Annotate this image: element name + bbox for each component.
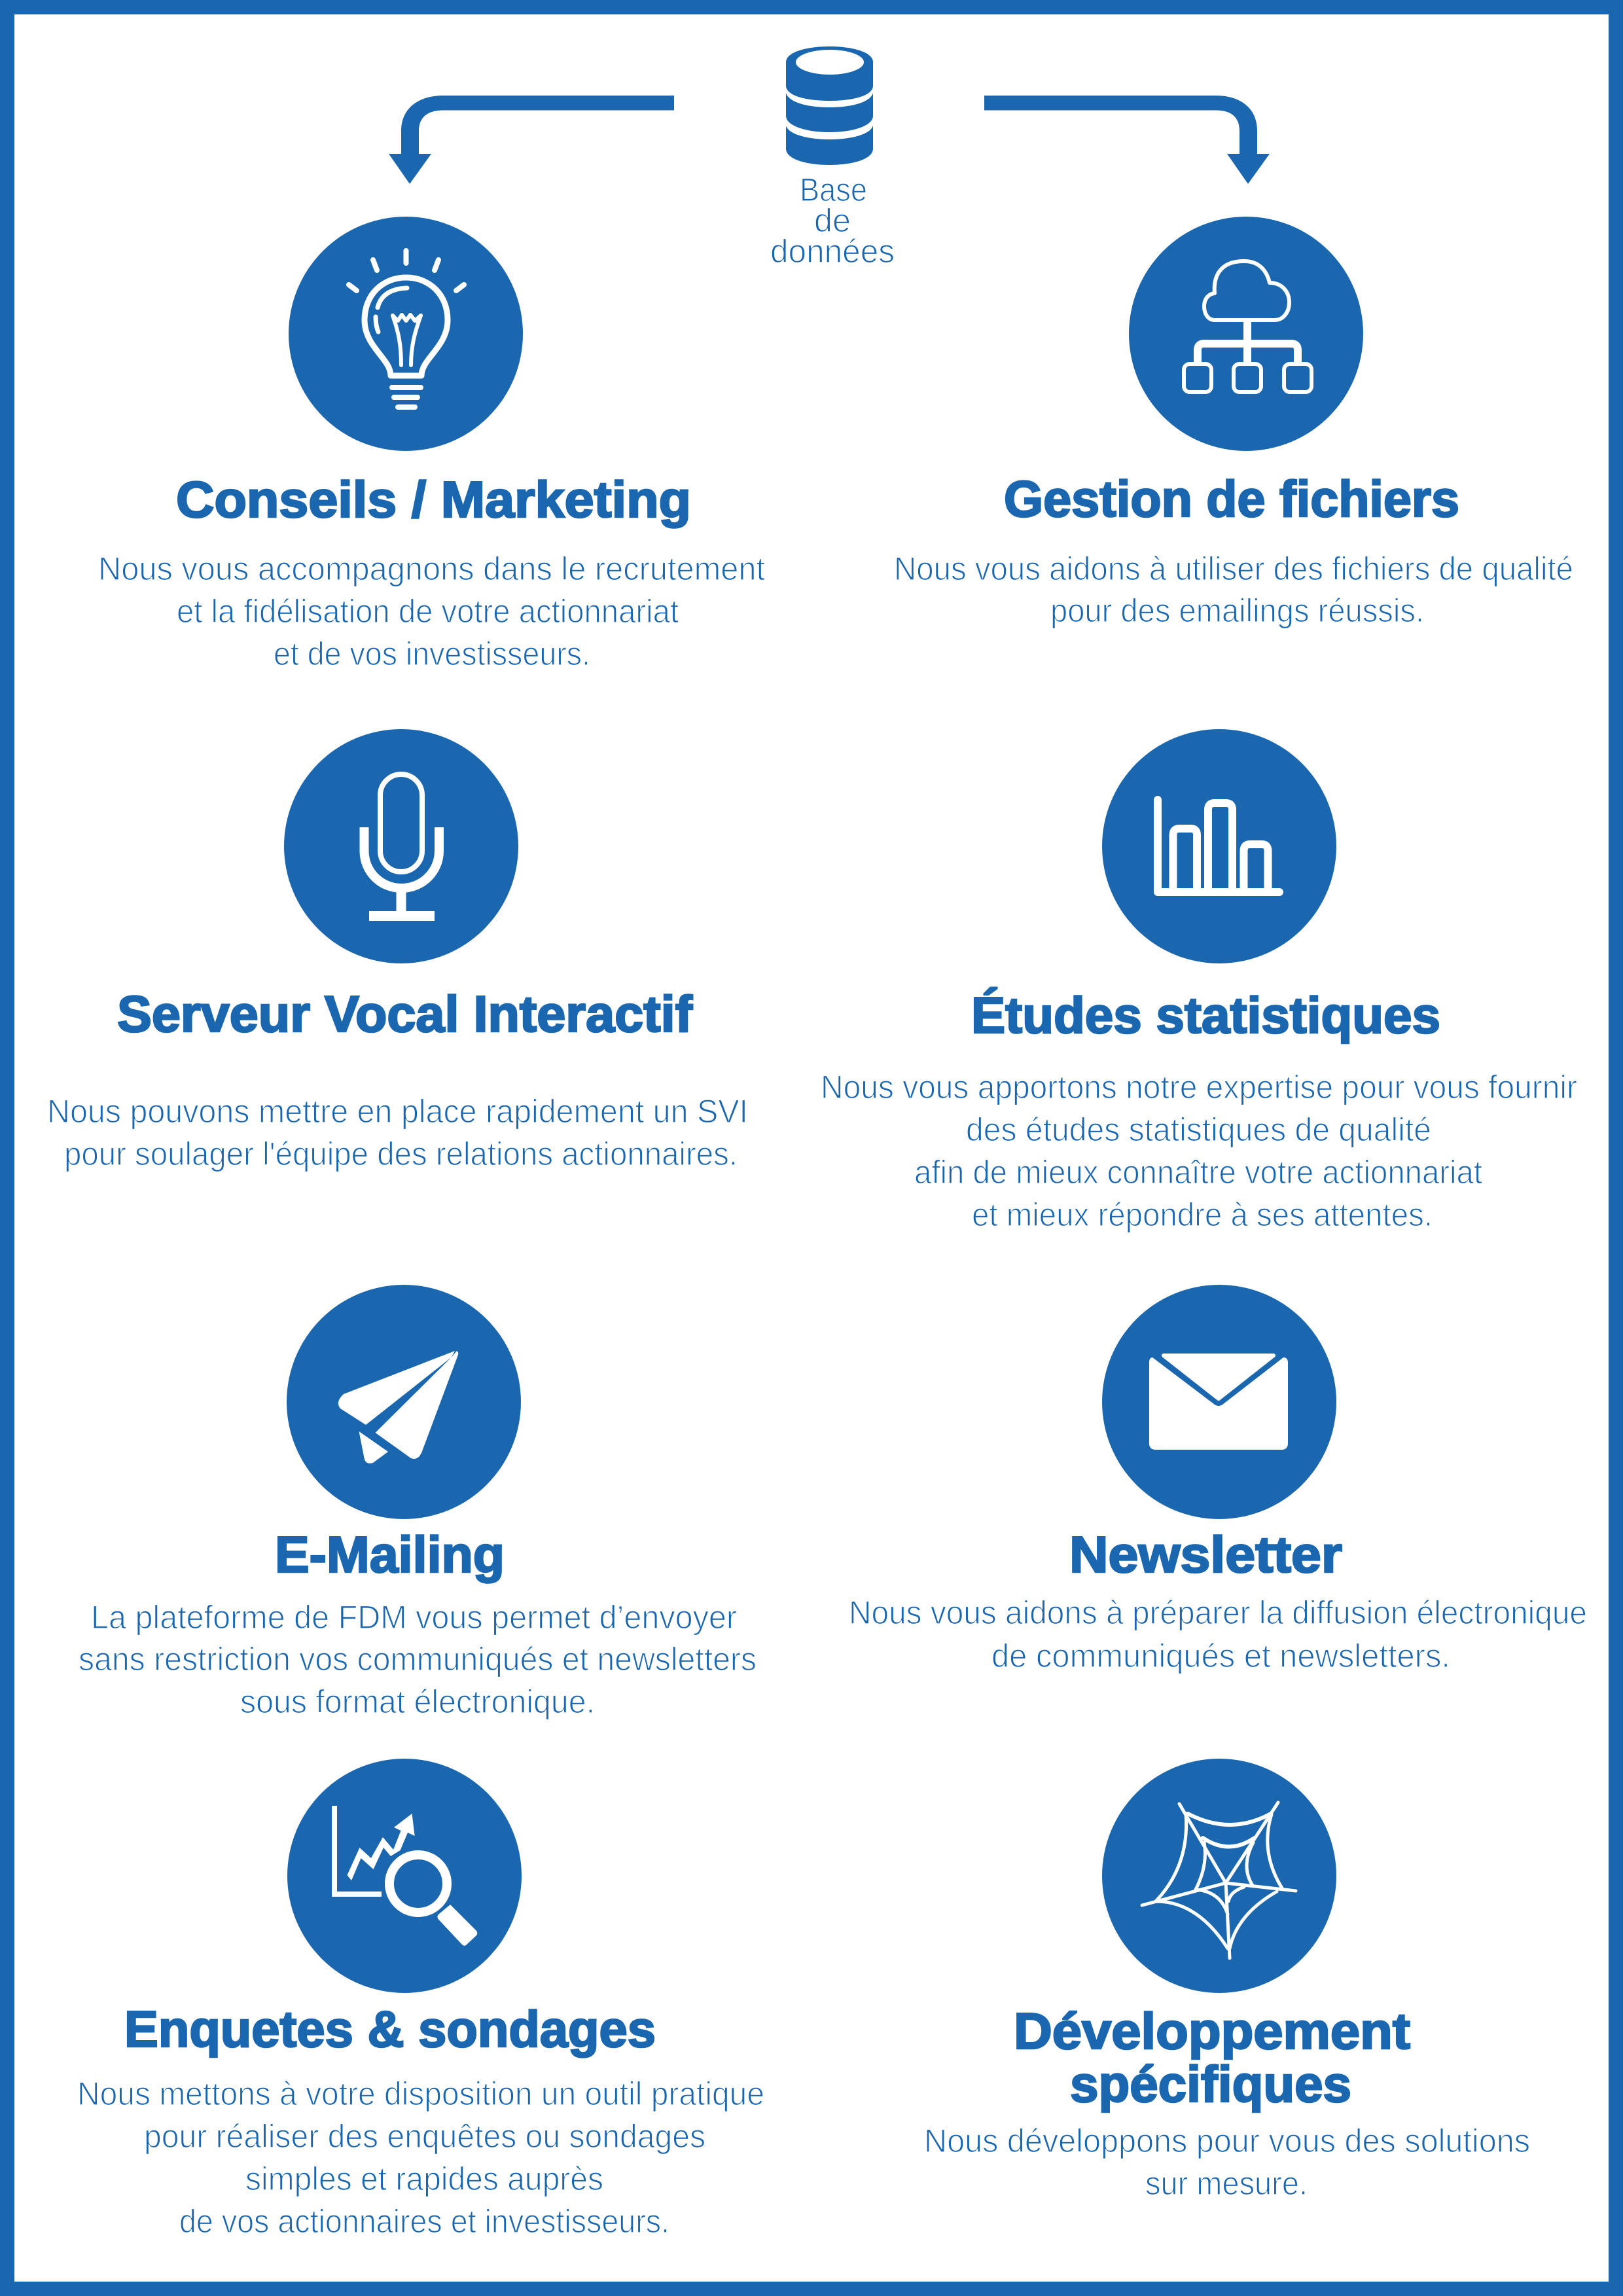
text block: et de vos investisseurs. <box>274 636 590 672</box>
text block <box>77 2075 764 2240</box>
heading: E-Mailing <box>275 1526 505 1583</box>
heading: Serveur Vocal Interactif <box>117 985 693 1043</box>
heading: spécifiques <box>1070 2055 1351 2113</box>
heading: Développement <box>1014 2002 1410 2060</box>
panel: développement spécifiques <box>924 1759 1530 2202</box>
panel: newsletter <box>849 1285 1587 1674</box>
icon: bar chart <box>1102 729 1336 963</box>
text block: des études statistiques de qualité <box>966 1111 1431 1148</box>
label: base de données: Base <box>800 171 867 208</box>
heading: Newsletter <box>1069 1526 1342 1583</box>
text block: simples et rapides auprès <box>245 2161 603 2197</box>
text block: et la fidélisation de votre actionnariat <box>177 593 679 630</box>
text block: sans restriction vos communiqués et newsletters <box>79 1641 757 1677</box>
icon: chart with magnifier <box>287 1759 522 1993</box>
text block <box>79 1599 757 1720</box>
text block <box>924 2123 1530 2202</box>
text block <box>894 550 1573 629</box>
text block: de vos actionnaires et investisseurs. <box>179 2203 669 2240</box>
text block: La plateforme de FDM vous permet d’envoyer <box>91 1599 737 1636</box>
text block: sous format électronique. <box>240 1683 595 1720</box>
icon: envelope <box>1102 1285 1336 1519</box>
text block: Nous mettons à votre disposition un outil pratique <box>77 2075 764 2112</box>
text block: Nous développons pour vous des solutions <box>924 2123 1530 2159</box>
panel: gestion de fichiers <box>894 217 1573 629</box>
text block: pour des emailings réussis. <box>1050 592 1424 629</box>
text block: Nous vous aidons à utiliser des fichiers de qualité <box>894 550 1573 587</box>
text block: pour réaliser des enquêtes ou sondages <box>144 2118 705 2155</box>
icon: lightbulb <box>289 217 523 451</box>
heading: Études statistiques <box>971 986 1440 1044</box>
label: base de données: de <box>814 202 851 239</box>
panel: enquetes et sondages <box>77 1759 764 2240</box>
label: base de données: données <box>770 233 895 270</box>
heading <box>1014 2002 1410 2113</box>
text block: pour soulager l'équipe des relations actionnaires. <box>64 1136 738 1172</box>
text block <box>98 550 765 672</box>
icon: database <box>786 46 873 165</box>
text block <box>47 1093 748 1172</box>
text block: Nous vous apportons notre expertise pour vous fournir <box>821 1069 1577 1105</box>
text block: de communiqués et newsletters. <box>991 1638 1450 1674</box>
text block <box>849 1594 1587 1674</box>
text block: Nous vous accompagnons dans le recrutement <box>98 550 765 587</box>
text block: Nous pouvons mettre en place rapidement un SVI <box>47 1093 748 1130</box>
arrow: left <box>389 96 674 184</box>
text block <box>821 1069 1577 1233</box>
arrow: right <box>984 96 1270 184</box>
heading: Enquetes & sondages <box>124 2000 656 2058</box>
text block: afin de mieux connaître votre actionnariat <box>914 1154 1482 1191</box>
panel: études statistiques <box>821 729 1577 1233</box>
text block: Nous vous aidons à préparer la diffusion électronique <box>849 1594 1587 1631</box>
text block: sur mesure. <box>1145 2165 1308 2202</box>
panel: serveur vocal interactif <box>47 729 748 1172</box>
panel: e-mailing <box>79 1285 757 1720</box>
label: base de données <box>770 171 895 270</box>
icon: microphone <box>284 729 518 963</box>
text block: et mieux répondre à ses attentes. <box>972 1196 1433 1233</box>
panel: conseils marketing <box>98 217 765 672</box>
icon: paper plane <box>287 1285 521 1519</box>
heading: Gestion de fichiers <box>1004 470 1459 528</box>
heading: Conseils / Marketing <box>176 471 691 528</box>
icon: spider web <box>1102 1759 1336 1993</box>
icon: cloud network <box>1129 217 1363 451</box>
